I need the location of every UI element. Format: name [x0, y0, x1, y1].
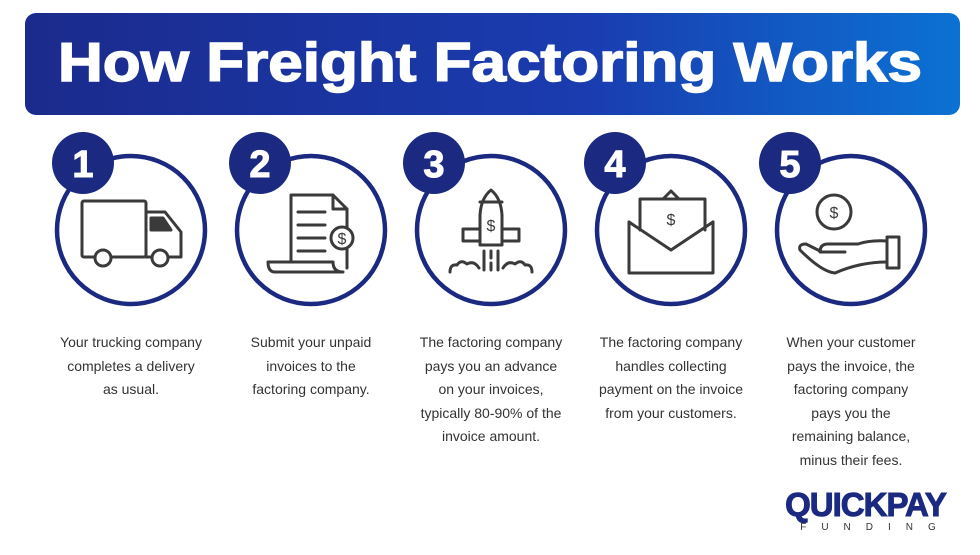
- text: step 3: [420, 334, 562, 444]
- text: step 2: [251, 334, 371, 397]
- icon: invoice: [268, 195, 353, 272]
- steps graphic: [52, 132, 928, 306]
- text: step 3: invoice amount.: [442, 428, 540, 444]
- logo: QUICKPAY: [785, 486, 946, 523]
- steps graphic: 5: [779, 144, 801, 186]
- title banner: [25, 13, 960, 115]
- steps graphic: $: [338, 231, 347, 248]
- text: step 2: factoring company.: [252, 381, 370, 397]
- text: step 5: When your customer: [786, 334, 916, 350]
- text: step 4: payment on the invoice: [599, 381, 743, 397]
- text: step 4: The factoring company: [600, 334, 742, 350]
- title banner: How Freight Factoring Works: [58, 31, 922, 93]
- text: step 5: minus their fees.: [800, 452, 902, 468]
- text: step 1: Your trucking company: [60, 334, 202, 350]
- text: step 5: factoring company: [794, 381, 908, 397]
- icon: envelope: [629, 191, 713, 273]
- icon: truck: [82, 201, 181, 266]
- text: step 1: as usual.: [103, 381, 159, 397]
- steps graphic: $: [667, 212, 676, 229]
- steps graphic: 2: [249, 144, 271, 186]
- icon: rocket: [450, 190, 532, 272]
- text: step 1: completes a delivery: [67, 358, 195, 374]
- text: step 5: remaining balance,: [792, 428, 910, 444]
- text: step 4: from your customers.: [605, 405, 737, 421]
- text: step 2: invoices to the: [266, 358, 356, 374]
- icon: hand with coin: [800, 195, 899, 273]
- text: step 3: pays you an advance: [425, 358, 557, 374]
- steps graphic: $: [487, 218, 496, 235]
- logo: FUNDING: [800, 522, 951, 533]
- text: step 4: handles collecting: [615, 358, 727, 374]
- text: step 3: on your invoices,: [438, 381, 544, 397]
- steps graphic: 1: [72, 144, 94, 186]
- step badges: [52, 132, 821, 194]
- text: step 4: [599, 334, 743, 421]
- steps graphic: 4: [604, 144, 626, 186]
- text: step 3: The factoring company: [420, 334, 562, 350]
- text: step 3: typically 80-90% of the: [421, 405, 561, 421]
- text: step 5: pays you the: [811, 405, 891, 421]
- text: step 5: pays the invoice, the: [787, 358, 915, 374]
- text: step 1: [60, 334, 202, 397]
- steps graphic: 3: [423, 144, 445, 186]
- text: step 2: Submit your unpaid: [251, 334, 371, 350]
- steps graphic: $: [830, 205, 839, 222]
- text: step 5: [786, 334, 916, 468]
